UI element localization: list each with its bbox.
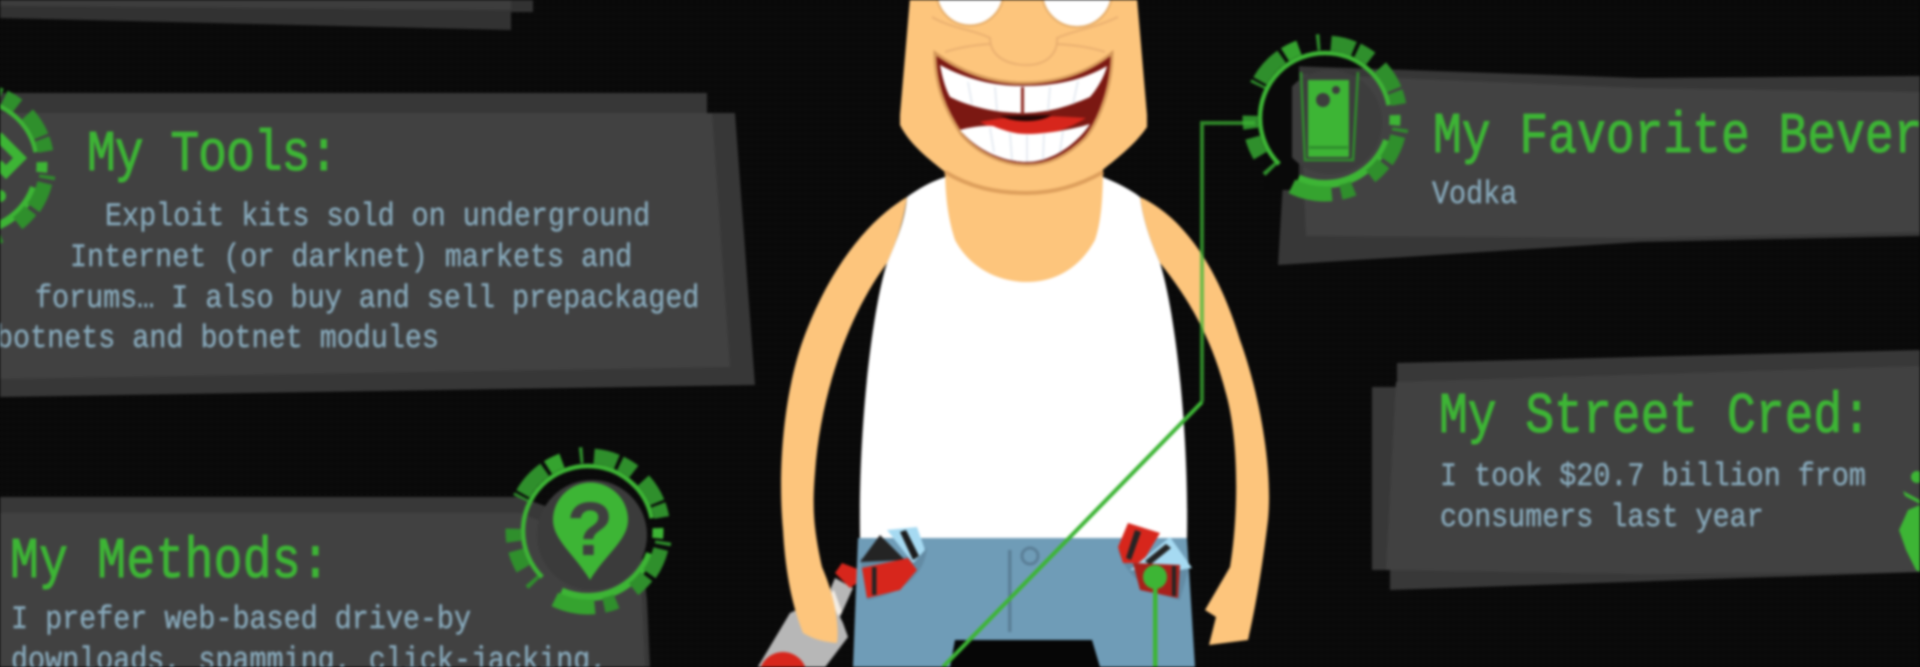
character: hacker	[756, 0, 1269, 667]
right pocket with cards	[1118, 523, 1192, 600]
text block: tools description	[0, 199, 699, 358]
panel: my street cred	[1372, 350, 1920, 590]
panel: my tools	[0, 89, 755, 397]
head	[900, 0, 1147, 193]
text block: street cred description	[1440, 459, 1866, 537]
tongue	[980, 116, 1086, 136]
icon: methods gear	[512, 455, 664, 607]
connector line from right pocket	[1143, 565, 1167, 667]
text block: tools description: Internet (or darknet) markets and	[70, 240, 632, 277]
icon: glass	[1301, 72, 1358, 160]
zipper	[1008, 550, 1012, 632]
crotch gap	[950, 640, 1100, 667]
text block: tools description: forums… I also buy and sell prepackaged	[35, 281, 699, 318]
text block: street cred description: I took $20.7 billion from	[1440, 459, 1866, 496]
icon: location pin with question mark: ?	[567, 487, 613, 572]
tooth separators	[968, 81, 1078, 111]
connector line to beverage icon	[943, 123, 1255, 667]
panel: my favorite beverage	[1249, 42, 1920, 265]
panel front layer	[0, 513, 645, 667]
neck	[945, 165, 1103, 282]
panel: top left (cropped)	[0, 0, 533, 30]
tooth gap	[1021, 87, 1024, 115]
panel back layer	[0, 497, 650, 667]
panel front layer	[1386, 366, 1920, 574]
text block: tools description: botnets and botnet modules	[0, 321, 439, 358]
panel back layer	[1372, 350, 1920, 590]
panel front layer	[0, 113, 730, 379]
mouth	[935, 53, 1112, 165]
button	[1022, 548, 1038, 564]
icon: tools gear	[0, 89, 48, 241]
icon: location pin with question mark	[553, 482, 628, 580]
right arm	[1140, 197, 1269, 645]
shirt	[860, 177, 1187, 538]
lower tooth separators	[990, 128, 1063, 162]
panel back layer	[1278, 66, 1920, 265]
panel: my methods	[0, 455, 664, 667]
lower teeth	[960, 124, 1090, 162]
glasses	[936, 0, 1112, 27]
nose	[932, 17, 1118, 65]
text block: tools description: Exploit kits sold on underground	[105, 199, 650, 236]
panel front layer	[1299, 74, 1920, 238]
heading: my street cred: My Street Cred:	[1439, 384, 1871, 449]
text block: methods description: I prefer web-based drive-by	[11, 602, 471, 639]
heading: my tools: My Tools:	[87, 122, 337, 187]
left arm	[781, 197, 907, 643]
bottle	[756, 563, 860, 667]
left pocket with cards	[860, 527, 927, 600]
text block: street cred description: consumers last year	[1440, 500, 1764, 537]
heading: my methods: My Methods:	[10, 529, 330, 594]
text block: methods description	[11, 602, 607, 667]
icon: street cred gear (cropped)	[1899, 471, 1920, 572]
jeans	[853, 538, 1195, 667]
panel back layer	[0, 93, 755, 397]
upper teeth	[940, 65, 1107, 113]
icon: beverage gear	[1249, 42, 1401, 194]
chin shadow	[945, 172, 1103, 193]
text block: vodka: Vodka	[1432, 177, 1517, 214]
